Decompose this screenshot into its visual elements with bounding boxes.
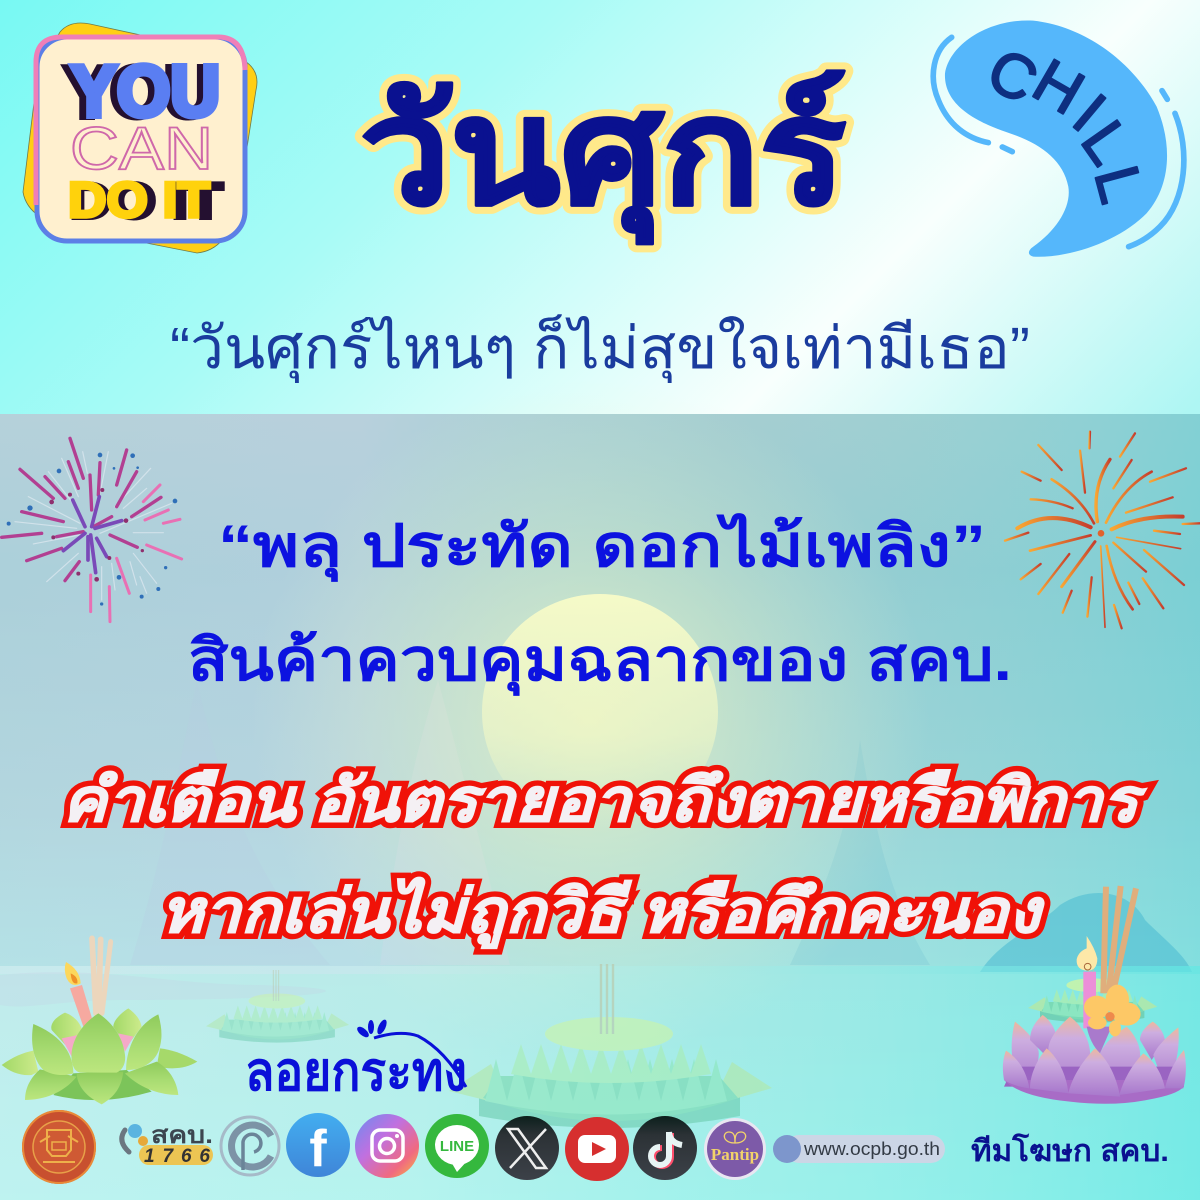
heading: Friday: วันศุกร์ [360, 70, 846, 244]
icon: you can do it badge: DO IT [68, 172, 210, 228]
icon: website [773, 1135, 945, 1163]
text: fireworks title: “พลุ ประทัด ดอกไม้เพลิง” [218, 513, 986, 583]
illustration: faded large krathong [449, 964, 772, 1128]
panel: lower festival background [0, 380, 1200, 1200]
icon: chill speech bubble: H [1022, 46, 1095, 128]
text: loy krathong [245, 1018, 467, 1102]
icon: you can do it badge: CAN [70, 115, 213, 182]
icon: hotline 1766: สคบ. [151, 1122, 213, 1149]
icon: chill speech bubble: L [1081, 159, 1156, 210]
text: team credit: ทีมโฆษก สคบ. [971, 1132, 1169, 1168]
icon: purple firework [2, 438, 182, 622]
text: label requirement: สินค้าควบคุมฉลากของ สคบ. [188, 628, 1012, 697]
icon: chill speech bubble: C [976, 35, 1048, 117]
icon: you can do it badge [23, 23, 257, 253]
icon: chill speech bubble: I [1060, 81, 1118, 145]
warning line 2: หากเล่นไม่ถูกวิธี หรือคึกคะนอง [160, 877, 1045, 949]
tagline: “วันศุกร์ไหนๆ ก็ไม่สุขใจเท่ามีเธอ” [170, 314, 1030, 384]
icon: ocpb logo [221, 1117, 279, 1175]
illustration: purple krathong [1003, 886, 1186, 1104]
illustration: faded right krathong [1028, 957, 1157, 1023]
icon: line [425, 1114, 489, 1178]
icon: pantip [704, 1118, 766, 1180]
icon: orange firework [1005, 432, 1200, 628]
warning line 1: คำเตือน อันตรายอาจถึงตายหรือพิการ [62, 767, 1148, 834]
illustration: faded small krathong [206, 970, 349, 1043]
warning line 1: คำเตือน อันตรายอาจถึงตายหรือพิการ [62, 767, 1148, 834]
icon: tiktok [633, 1116, 697, 1180]
icon: chill speech bubble: L [1068, 109, 1144, 177]
icon: hotline 1766: 1766 [144, 1146, 210, 1167]
icon: x [495, 1116, 559, 1180]
icon: you can do it badge: YOU [71, 52, 220, 132]
panel: header background [0, 0, 1200, 414]
icon: instagram [355, 1114, 419, 1178]
icon: facebook: f [309, 1120, 327, 1178]
icon: youtube [565, 1117, 629, 1181]
icon: you can do it badge: YOU [64, 53, 214, 133]
icon: website: www.ocpb.go.th [803, 1139, 940, 1159]
warning line 2: หากเล่นไม่ถูกวิธี หรือคึกคะนอง [160, 877, 1045, 949]
icon: hotline 1766 [122, 1122, 213, 1167]
illustration: green krathong [2, 938, 197, 1104]
heading: Friday: วันศุกร์ [360, 70, 846, 244]
text: loy krathong: ลอยกระทง [245, 1042, 467, 1102]
icon: line: LINE [440, 1138, 474, 1155]
icon: chill speech bubble [933, 21, 1184, 257]
icon: pantip: Pantip [711, 1145, 759, 1164]
icon: facebook [286, 1113, 350, 1178]
icon: agency seal [22, 1110, 96, 1184]
icon: you can do it badge: DO IT [70, 173, 223, 229]
